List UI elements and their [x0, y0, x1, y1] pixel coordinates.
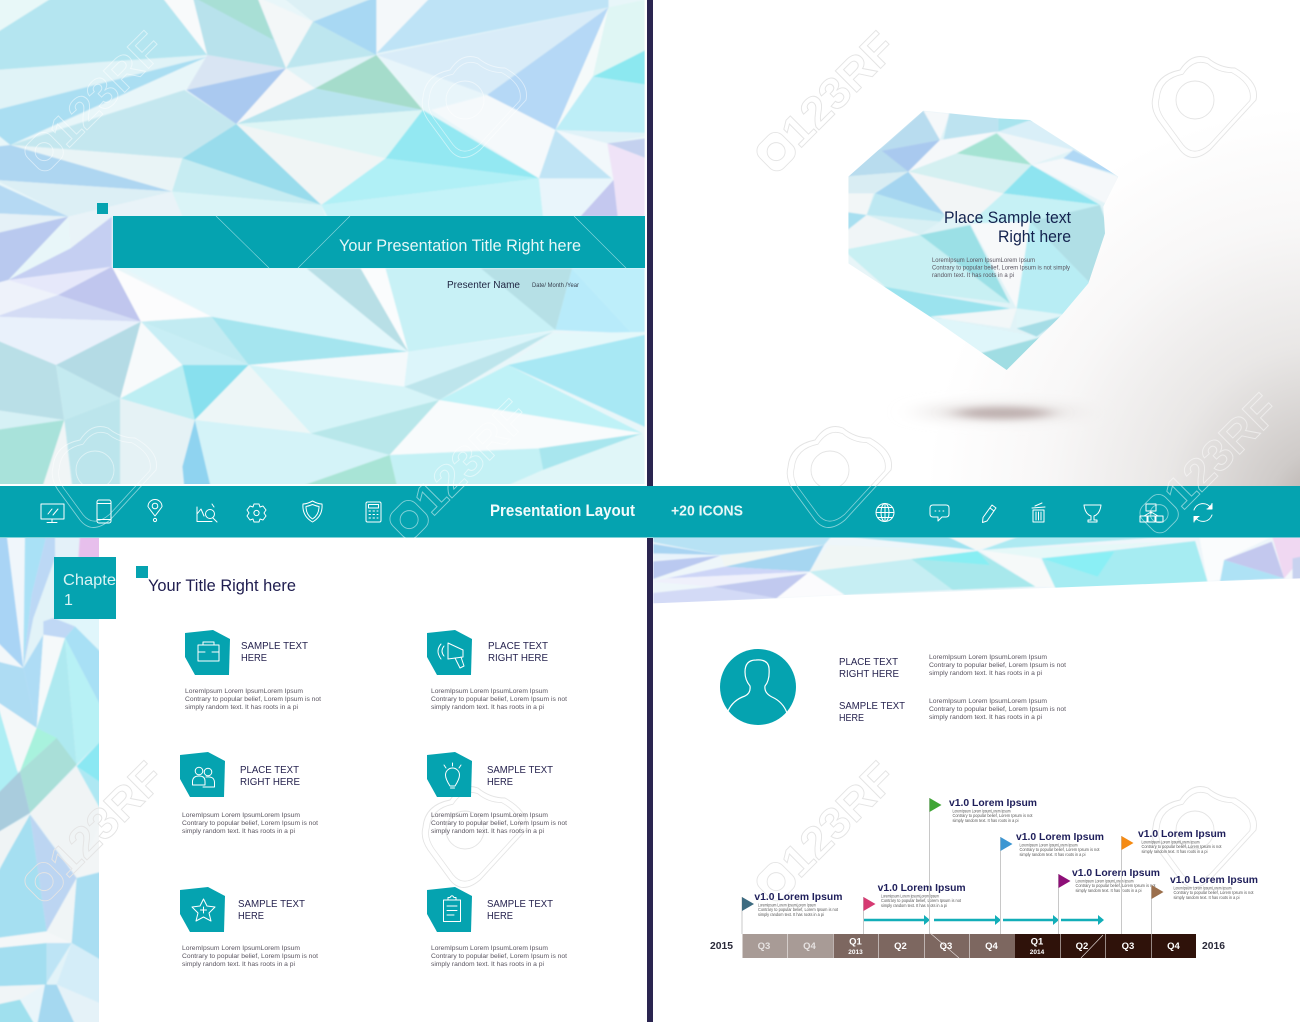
quarter bar: Q2 [1076, 941, 1088, 952]
milestone 6 [1122, 828, 1226, 934]
panel: gem slide [756, 30, 1300, 486]
milestone 2: Contrary to popular belief, Lorem Ipsum is not [881, 898, 962, 903]
low-poly gem [848, 110, 1118, 370]
milestone 4: v1.0 Lorem Ipsum [1016, 831, 1104, 843]
gem body text [932, 257, 1071, 279]
watermark: 123RF [16, 753, 174, 911]
watermark: stamp lower [52, 426, 157, 528]
quarter bar: 2013 [848, 949, 863, 956]
panel: chapter slide [0, 531, 567, 1022]
milestone 3: simply random text. It has roots in a pi [952, 818, 1019, 823]
milestone 5: simply random text. It has roots in a pi [1076, 888, 1142, 893]
heading: HERE [238, 910, 264, 922]
icon: gear [247, 504, 266, 522]
heading: PLACE TEXT [240, 764, 300, 776]
heading: HERE [241, 652, 267, 664]
icon: briefcase [185, 630, 230, 675]
milestone 6: v1.0 Lorem Ipsum [1138, 828, 1226, 840]
watermark: 123RF lower: 123RF [405, 391, 539, 525]
profile row 1: RIGHT HERE [839, 668, 899, 680]
milestone 5 [1058, 867, 1160, 934]
icon: trophy [1084, 505, 1101, 522]
milestone 7: Contrary to popular belief, Lorem Ipsum is not [1174, 890, 1254, 895]
quarter bar: Q3 [1122, 941, 1134, 952]
body text: LoremIpsum Lorem IpsumLorem Ipsum [431, 945, 548, 952]
gem body text: Contrary to popular belief, Lorem Ipsum is not simply [932, 264, 1071, 272]
low-poly background [0, 0, 659, 500]
profile row 2: LoremIpsum Lorem IpsumLorem Ipsum [929, 698, 1047, 705]
watermark: 123RF: 123RF [40, 753, 174, 887]
watermark: 123RF upper: 123RF [40, 23, 174, 157]
quarter bar: Q4 [1167, 941, 1181, 952]
milestone arrows [864, 915, 1104, 925]
milestone 1: Contrary to popular belief, Lorem Ipsum is not [758, 907, 839, 912]
body text [185, 688, 321, 711]
milestone 4: Contrary to popular belief, Lorem Ipsum is not [1020, 847, 1100, 852]
milestone 5: Contrary to popular belief, Lorem Ipsum is not [1076, 883, 1156, 888]
quarter bar: Q1 [1031, 936, 1044, 948]
body text: Contrary to popular belief, Lorem Ipsum is not [431, 953, 567, 960]
milestone 2: LoremIpsum Lorem IpsumLorem Ipsum [881, 894, 939, 898]
body text [431, 812, 567, 835]
milestone 3: LoremIpsum Lorem IpsumLorem Ipsum [952, 808, 1011, 814]
body text: simply random text. It has roots in a pi [431, 961, 544, 968]
heading: SAMPLE TEXT [241, 640, 309, 652]
icon: phone [97, 500, 111, 523]
quarter bar: Q4 [985, 941, 999, 952]
heading [487, 898, 554, 922]
divider: vertical bars [647, 0, 653, 1022]
watermark: 123RF upper [16, 23, 174, 181]
watermark: 123RF lower [381, 391, 539, 549]
quarter bar: Q4 [803, 941, 817, 952]
heading: SAMPLE TEXT [487, 898, 554, 910]
card: sample text star [180, 887, 318, 968]
icon: globe [876, 504, 894, 522]
heading [488, 640, 549, 664]
milestone 6: simply random text. It has roots in a pi [1142, 849, 1208, 854]
milestone 2: v1.0 Lorem Ipsum [878, 882, 966, 894]
watermark: stamp upper [422, 56, 527, 158]
band background [0, 486, 1300, 538]
band watermarks [55, 486, 1208, 538]
milestone 3 [930, 797, 1037, 934]
card: place text people [180, 752, 318, 835]
icon: pin [148, 500, 162, 522]
end year: 2016 [1202, 940, 1225, 952]
heading: SAMPLE TEXT [487, 764, 554, 776]
milestone 1 [742, 891, 842, 934]
gem shadow [917, 403, 1087, 421]
body text [182, 812, 318, 835]
milestone 1: v1.0 Lorem Ipsum [754, 891, 842, 903]
watermark: 123RF lower: 123RF [1155, 385, 1289, 519]
milestone 4: simply random text. It has roots in a pi [1020, 852, 1086, 857]
body text: simply random text. It has roots in a pi [182, 828, 295, 835]
body text: simply random text. It has roots in a pi [431, 704, 544, 711]
milestone 1: LoremIpsum Lorem IpsumLorem Ipsum [758, 902, 816, 908]
body text: simply random text. It has roots in a pi [182, 961, 295, 968]
watermark: stamp [1152, 786, 1257, 888]
gem heading: Right here [998, 228, 1071, 246]
icon: shield [303, 501, 322, 522]
icon: chart search [197, 504, 217, 522]
icon: clipboard [427, 887, 472, 932]
quarter bar: Q3 [758, 941, 770, 952]
panel: icon band [0, 486, 1300, 538]
title marker square [136, 566, 148, 578]
profile row 2 [839, 698, 1066, 724]
watermark: 123RF [748, 23, 906, 181]
icon: chat [930, 505, 949, 521]
gem heading [944, 209, 1071, 246]
band subtitle: +20 ICONS [671, 502, 743, 520]
icon: calculator [366, 502, 381, 522]
watermark: 123RF: 123RF [772, 753, 906, 887]
low-poly side strip [0, 531, 107, 1022]
profile row 2: simply random text. It has roots in a pi [929, 714, 1042, 721]
low-poly header strip [653, 538, 1300, 604]
icon: megaphone [427, 630, 472, 675]
body text: LoremIpsum Lorem IpsumLorem Ipsum [182, 812, 300, 819]
body text: simply random text. It has roots in a pi [185, 704, 298, 711]
card: sample text briefcase [185, 630, 321, 711]
icon: people [180, 752, 225, 797]
body text: Contrary to popular belief, Lorem Ipsum is not [431, 820, 567, 827]
watermark: stamp lower [787, 426, 892, 528]
body text: Contrary to popular belief, Lorem Ipsum is not [431, 696, 567, 703]
profile row 2: SAMPLE TEXT [839, 700, 906, 712]
profile row 2: Contrary to popular belief, Lorem Ipsum is not [929, 706, 1066, 713]
milestone 6: Contrary to popular belief, Lorem Ipsum is not [1142, 844, 1222, 849]
backdrop gradient [653, 0, 1300, 486]
band watermarks: 123RF [405, 391, 539, 525]
quarter bar: 2014 [1030, 949, 1045, 956]
icon: light bulb [427, 752, 472, 797]
panel: timeline slide [642, 528, 1300, 958]
milestone 7: v1.0 Lorem Ipsum [1170, 874, 1258, 886]
heading [240, 764, 300, 788]
card: place text megaphone [427, 630, 567, 711]
body text: LoremIpsum Lorem IpsumLorem Ipsum [185, 688, 303, 695]
icon: pencil [982, 505, 996, 522]
icon: trash [1032, 503, 1045, 522]
gem body text: random text. It has roots in a pi [932, 272, 1014, 279]
card: sample text clipboard [427, 887, 567, 968]
watermark: stamp [1152, 56, 1257, 158]
milestone 3: Contrary to popular belief, Lorem Ipsum is not [952, 813, 1033, 818]
heading: HERE [487, 776, 513, 788]
profile row 1: PLACE TEXT [839, 656, 899, 668]
presenter name: Presenter Name [447, 279, 520, 291]
icon: monitor [41, 504, 64, 522]
body text: LoremIpsum Lorem IpsumLorem Ipsum [431, 688, 548, 695]
body text: LoremIpsum Lorem IpsumLorem Ipsum [431, 812, 548, 819]
heading: RIGHT HERE [488, 652, 548, 664]
panel: title slide [0, 0, 645, 484]
accent square [97, 203, 108, 214]
chapter box: 1 [64, 592, 73, 609]
milestone 2 [864, 882, 966, 934]
watermark: stamp [422, 786, 527, 888]
start year: 2015 [710, 940, 733, 952]
watermark: 123RF lower [1131, 385, 1289, 543]
date: Date/ Month /Year [532, 283, 579, 289]
timeline chart [710, 797, 1258, 958]
body text [431, 945, 567, 968]
card: sample text bulb [427, 752, 567, 835]
milestone 5: v1.0 Lorem Ipsum [1072, 867, 1160, 879]
quarter bar: Q2 [894, 941, 907, 952]
heading [241, 640, 309, 664]
milestone 5: LoremIpsum Lorem IpsumLorem Ipsum [1076, 878, 1134, 884]
profile row 1: LoremIpsum Lorem IpsumLorem Ipsum [929, 654, 1047, 661]
milestone 7 [1152, 874, 1258, 934]
body text: simply random text. It has roots in a pi [431, 828, 544, 835]
body text [431, 688, 567, 711]
profile row 2: HERE [839, 712, 864, 724]
watermark: 123RF [748, 753, 906, 911]
band watermarks: 123RF [1155, 385, 1289, 519]
heading [487, 764, 554, 788]
heading: RIGHT HERE [240, 776, 300, 788]
body text [182, 945, 318, 968]
milestone 3: v1.0 Lorem Ipsum [949, 797, 1037, 809]
milestone 2: simply random text. It has roots in a pi [881, 903, 947, 908]
chapter box: Chapte [63, 572, 116, 589]
milestone 4: LoremIpsum Lorem IpsumLorem Ipsum [1020, 842, 1078, 848]
icon: org chart [1140, 504, 1163, 522]
milestone 6: LoremIpsum Lorem IpsumLorem Ipsum [1142, 840, 1200, 844]
chapter box [54, 557, 116, 619]
gem heading: Place Sample text [944, 209, 1071, 227]
body text: Contrary to popular belief, Lorem Ipsum is not [182, 953, 318, 960]
band title: Presentation Layout [490, 502, 635, 520]
profile row 1 [839, 654, 1066, 680]
body text: LoremIpsum Lorem IpsumLorem Ipsum [182, 945, 300, 952]
gem body text: LoremIpsum Lorem IpsumLorem Ipsum [932, 257, 1035, 264]
heading [238, 898, 306, 922]
slide title: Your Title Right here [148, 576, 296, 595]
watermark: 123RF: 123RF [772, 23, 906, 157]
icon: star [180, 887, 225, 932]
quarter bar: Q3 [940, 941, 952, 952]
heading: HERE [487, 910, 513, 922]
icon: refresh [1194, 504, 1212, 522]
quarter bar [742, 932, 1196, 958]
body text: Contrary to popular belief, Lorem Ipsum is not [182, 820, 318, 827]
quarter bar: Q1 [849, 936, 863, 948]
heading: SAMPLE TEXT [238, 898, 306, 910]
avatar [720, 649, 796, 725]
milestone 4 [1000, 831, 1104, 934]
milestone 7: simply random text. It has roots in a pi [1174, 895, 1240, 900]
milestone 7: LoremIpsum Lorem IpsumLorem Ipsum [1174, 886, 1232, 890]
profile row 1: simply random text. It has roots in a pi [929, 670, 1042, 677]
title banner: Your Presentation Title Right here [339, 236, 581, 255]
milestone 1: simply random text. It has roots in a pi [758, 912, 824, 917]
body text: Contrary to popular belief, Lorem Ipsum is not [185, 696, 321, 703]
heading: PLACE TEXT [488, 640, 549, 652]
profile row 1: Contrary to popular belief, Lorem Ipsum is not [929, 662, 1066, 669]
title banner [113, 216, 645, 268]
